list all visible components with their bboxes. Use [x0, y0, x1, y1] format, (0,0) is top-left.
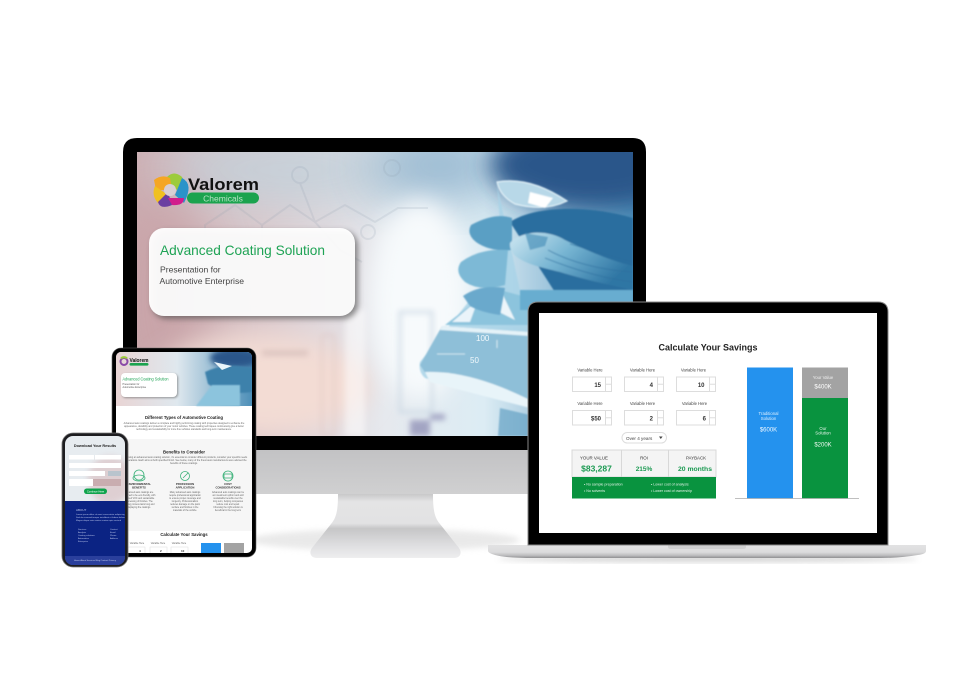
- monitor: [123, 138, 646, 558]
- benefit text: beneficial in the long term: [215, 509, 241, 512]
- benefit text: coating process lasts long and: [124, 503, 155, 506]
- tablet calculator preview: Calculate Your Savings: [160, 532, 208, 537]
- tablet benefits section: In choosing an advanced auto coating solution, it's essential to consider different products, consider your specific needs: [121, 456, 248, 459]
- logo pill: Chemicals: [203, 194, 243, 204]
- phone form fields: [69, 455, 121, 486]
- card heading: Advanced Coating Solution: [160, 242, 325, 258]
- tablet calculator preview: 2: [160, 549, 162, 553]
- tablet title card: Presentation for: [122, 383, 140, 386]
- benefit text: an investment upfront and add: [212, 494, 244, 497]
- tablet benefits section: benefits of these coatings.: [170, 462, 198, 465]
- benefit text: sustainable benefits over the: [213, 497, 243, 500]
- benefit text: to ensure proper coverage and: [169, 497, 201, 500]
- phone footer: ABOUT: [76, 508, 87, 512]
- phone footer: Sed do eiusmod tempor incididunt ut labore dolore: [76, 516, 126, 519]
- tablet benefits section: and operations. Each aims at both specified finish. See below, many of the finest auto manufacturers were advised the: [121, 459, 247, 462]
- benefit headings: CONSIDERATIONS: [215, 486, 241, 490]
- tablet calculator preview: 10: [181, 549, 185, 553]
- benefit text: displaying the coatings.: [127, 506, 151, 509]
- input grid: [577, 368, 708, 406]
- phone footer: Coating solutions: [78, 534, 96, 537]
- phone footer: Address: [110, 537, 119, 540]
- bar: traditional solution: $600K: [760, 428, 777, 434]
- benefit icons: [133, 470, 233, 481]
- tablet types section: Advanced auto coatings deliver a complete and highly performing coating with properties designed to enhance the: [124, 422, 245, 425]
- benefit text: reduced VOC and sustainable: [124, 497, 155, 500]
- benefit text: require professional application: [169, 494, 202, 497]
- results table: • No solvents: [584, 489, 605, 493]
- laptop notch: [668, 545, 746, 549]
- benefit text: longevity. Professionalism: [172, 500, 198, 503]
- laptop screen: [539, 313, 877, 533]
- benefit text: materials of the vehicle.: [173, 509, 197, 512]
- laptop lid: [528, 302, 888, 545]
- results table: • Lower cost of ownership: [651, 489, 692, 493]
- benefit text: long term, helping companies: [213, 500, 244, 503]
- logo wordmark: Valorem: [188, 175, 259, 194]
- bar: our solution: Our: [819, 426, 827, 431]
- results table: 20 months: [678, 466, 712, 473]
- results table: ROI: [640, 456, 648, 460]
- input values: $50: [591, 416, 602, 422]
- bar: our solution: Solution: [815, 430, 831, 436]
- tablet calculator preview: [128, 532, 244, 553]
- benefit text: Advanced auto coatings are: [125, 491, 154, 494]
- tablet: [112, 348, 260, 557]
- tablet logo: Valorem: [130, 358, 149, 364]
- benefit text: reduces damage on the paint: [170, 503, 200, 506]
- phone footer: Email: [110, 532, 116, 534]
- bar: traditional solution: [747, 368, 793, 498]
- tablet screen: [116, 348, 260, 555]
- laptop base: [488, 545, 926, 558]
- benefit headings: ENVIRONMENTAL: [127, 482, 151, 486]
- tablet title card: [121, 373, 178, 398]
- phone footer: Contact: [110, 528, 118, 531]
- flask rim: [497, 181, 567, 208]
- benefit text: reduce cost and repair.: [216, 503, 240, 506]
- flask marks: 50: [470, 356, 479, 365]
- bar chart: [735, 368, 859, 498]
- phone form heading: Download Your Results: [74, 444, 116, 448]
- bar: your value: [802, 368, 848, 398]
- input grid: Variable Here: [630, 401, 656, 406]
- input grid: Variable Here: [577, 368, 603, 372]
- bar: traditional solution: Traditional: [759, 411, 778, 416]
- card subtitle: Presentation for: [160, 264, 221, 274]
- monitor stand: [310, 494, 461, 558]
- tablet calculator preview: Variable Here: [151, 542, 166, 545]
- bar: our solution: $200K: [814, 442, 832, 448]
- phone: [62, 433, 132, 567]
- benefit text: Choosing the right solution is: [213, 506, 244, 509]
- calculator heading: Calculate Your Savings: [658, 342, 758, 354]
- title card: [149, 228, 358, 319]
- input values: 15: [594, 383, 602, 389]
- logo pill: [187, 192, 259, 204]
- benefit text: designed to be eco-friendly, with: [123, 494, 156, 497]
- results table: YOUR VALUE: [580, 456, 608, 460]
- laptop: [488, 302, 926, 558]
- benefit headings: COST: [224, 482, 232, 486]
- bar: your value: $400K: [814, 384, 832, 390]
- tablet types section: [124, 415, 245, 431]
- lab glassware background: [262, 310, 445, 436]
- results table: $83,287: [581, 464, 612, 474]
- gloved hand: [458, 209, 633, 315]
- tablet title card: Automotive Enterprise: [122, 386, 147, 389]
- input values: 2: [650, 416, 654, 422]
- benefit text: Many advanced auto coatings: [170, 491, 201, 494]
- input boxes: [572, 377, 716, 425]
- results table: • No sample preparation: [584, 482, 623, 486]
- tablet logo: [120, 357, 149, 366]
- benefit text: Advanced auto coatings can be: [212, 491, 245, 494]
- phone footer: Enterprise: [78, 540, 89, 543]
- year dropdown: Over 4 years: [626, 436, 653, 441]
- bar: your value: Your Value: [813, 375, 834, 380]
- phone screen: [65, 436, 125, 565]
- results table: • Lower cost of analysis: [651, 482, 689, 486]
- input grid: Variable Here: [682, 401, 708, 406]
- tablet benefits section: [116, 439, 252, 531]
- phone footer: Analysis: [78, 531, 87, 534]
- benefit headings: PROFESSION: [176, 482, 194, 486]
- tablet benefits section: Benefits to Consider: [163, 450, 205, 454]
- flask marks: 100: [476, 334, 490, 343]
- flask marks: [470, 335, 489, 363]
- ground shadow: [250, 529, 918, 562]
- benefit text: surface and finishes in the: [172, 506, 199, 509]
- tablet types section: technology and sustainability for more fine vehicles standards and long-term maintenance.: [136, 428, 232, 431]
- tablet calculator preview: Variable Here: [172, 542, 187, 545]
- results table: PAYBACK: [686, 456, 706, 460]
- tablet types section: Different Types of Automotive Coating: [145, 415, 223, 420]
- monitor body: [123, 138, 646, 450]
- year dropdown: [622, 432, 666, 443]
- flask: [420, 185, 530, 436]
- benefit headings: APPLICATION: [176, 486, 194, 490]
- molecule lines: [205, 160, 428, 268]
- tablet hero: [116, 352, 252, 407]
- benefit text: [123, 491, 245, 512]
- phone footer: Automotive: [78, 537, 90, 540]
- input values: 10: [698, 383, 705, 389]
- benefit headings: [128, 483, 240, 488]
- results table: [572, 450, 716, 498]
- input values: [591, 383, 707, 422]
- phone footer: Lorem ipsum dolor sit amet consectetur adipiscing elit: [76, 513, 128, 516]
- tablet types section: appearance, durability and protection of your motor vehicles. These coating techniques continuously give a better: [124, 425, 244, 428]
- results table: 215%: [636, 466, 653, 473]
- phone button: Continue Here: [87, 490, 105, 494]
- tablet title card: Advanced Coating Solution: [122, 376, 169, 382]
- card subtitle: Automotive Enterprise: [160, 276, 244, 286]
- green benefits strip: [572, 477, 716, 498]
- benefit text: processing of finishes. The: [125, 500, 153, 503]
- phone footer: Magna aliqua enim minim veniam quis nostrud: [76, 519, 122, 522]
- monitor chin: [123, 450, 646, 494]
- input values: 4: [650, 383, 654, 389]
- input grid: Variable Here: [630, 368, 656, 372]
- tablet calculator preview: 4: [139, 549, 141, 553]
- phone footer: Services: [78, 528, 87, 531]
- monitor screen photo: [137, 152, 633, 436]
- benefit headings: BENEFITS: [132, 486, 146, 490]
- phone footer: Phone: [110, 535, 117, 537]
- input grid: Variable Here: [577, 401, 603, 406]
- bar: our solution: [802, 398, 848, 498]
- phone footer: Home About Services Blog Contact Privacy: [74, 559, 117, 562]
- input grid: Variable Here: [681, 368, 707, 372]
- input values: 6: [703, 416, 707, 422]
- bar: traditional solution: Solution: [761, 416, 777, 421]
- tablet calculator preview: Variable Here: [130, 542, 145, 545]
- phone footer: [65, 501, 128, 565]
- logo: [154, 174, 189, 207]
